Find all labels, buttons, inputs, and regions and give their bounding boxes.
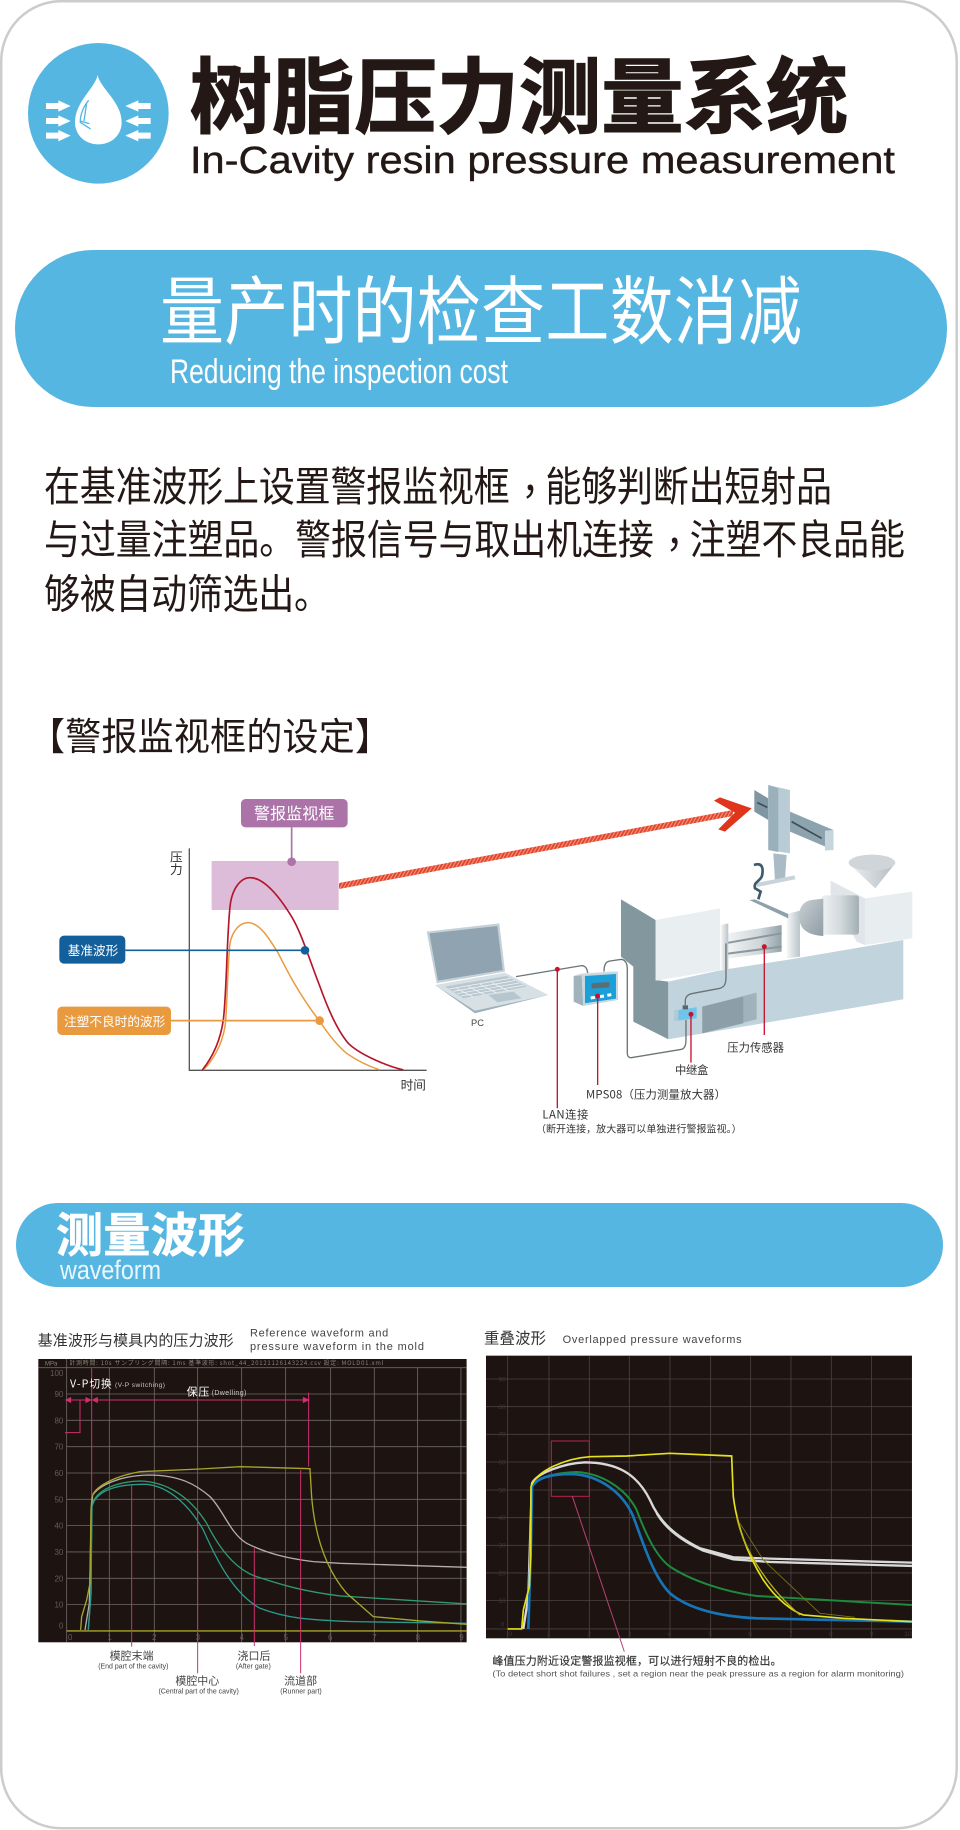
cables [516,943,726,1058]
x axis labels: 7 [372,1633,377,1642]
body text: 在基准波形上设置警报监视框 [44,454,510,514]
alarm region [551,1441,589,1496]
defective waveform label: 注塑不良时的波形 [64,1011,166,1030]
label: end part of the cavity [98,1647,168,1670]
axis labels: 4 [668,1631,672,1638]
panel heading english: Reference waveform and [250,1328,388,1340]
banner heading: 量产时的检查工数消减 [160,252,802,359]
body text: 能够判断出短射品 [545,454,832,514]
caption: 峰值压力附近设定警报监视框，可以进行短射不良的检出。 [492,1653,782,1669]
axis labels: 6 [748,1631,752,1638]
caption [492,1653,904,1679]
axis labels: 1 [547,1631,551,1638]
reference waveform curve [202,878,403,1070]
laptop PC [427,923,548,1028]
axis labels: 50 [498,1487,506,1494]
y axis labels [50,1369,64,1631]
callout line [572,1496,624,1652]
annotation: V-P switching: (V-P switching) [115,1382,165,1389]
x axis labels [68,1633,464,1642]
curve: after gate [85,1475,467,1630]
curve bundle: yellow [508,1453,912,1629]
panel heading: 重叠波形 [484,1326,546,1348]
subtitle: In-Cavity resin pressure measurement [190,140,895,182]
y axis labels: 80 [54,1416,64,1425]
panel heading: 基准波形与模具内的压力波形 [38,1330,234,1351]
x axis labels: 2 [152,1633,157,1642]
axes [189,848,427,1070]
annotation: dwelling: (Dwelling) [212,1390,246,1397]
pressure axis label: 力 [170,859,183,878]
x axis labels: 5 [284,1633,289,1642]
label: LAN connection [536,1106,742,1135]
curve: end part [88,1484,467,1630]
y axis labels: 100 [50,1369,64,1378]
banner subheading: waveform [59,1255,161,1285]
annotation lines [65,1368,309,1673]
y axis labels: 70 [54,1443,64,1452]
alarm region box [212,861,339,910]
caption: (To detect short shot failures , set a region near the peak pressure as a region for alarm monitoring) [492,1669,904,1679]
label: end part of the cavity: (End part of the cavity) [98,1663,168,1670]
banner heading: 测量波形 [56,1197,245,1266]
axis labels: 90 [498,1376,506,1383]
y axis labels: 0 [59,1622,64,1631]
curve: runner part [67,1467,467,1631]
label: LAN connection: （断开连接，放大器可以单独进行警报监视。） [536,1120,742,1135]
y axis labels: 20 [54,1574,64,1583]
panel: reference waveform [38,1328,467,1696]
MPS08 amplifier box [574,971,618,1006]
line chart: reference waveforms [38,1358,467,1673]
header strip text: MPa [45,1361,58,1367]
x axis labels: 4 [240,1633,245,1642]
label: central part of the cavity [158,1673,239,1696]
chart: alarm region concept [57,799,427,1093]
body text: 够被自动筛选出。 [44,562,330,621]
leader lines [555,944,767,1108]
x axis labels: 6 [328,1633,333,1642]
icon: water drop with pressure arrows [28,43,169,184]
label: after gate [236,1647,271,1670]
curve: central part [88,1481,467,1630]
time axis label: 时间 [401,1074,426,1093]
label: runner part [280,1673,322,1696]
body text: 注塑不良品能 [690,507,905,567]
laptop PC: PC [471,1018,484,1028]
axis labels: 10 [498,1598,506,1605]
annotation: dwelling: 保压 [187,1383,209,1399]
axis labels: 0 [501,1622,505,1629]
panel heading english: pressure waveform in the mold [250,1341,424,1353]
y axis labels: 50 [54,1495,64,1504]
axis labels: 60 [498,1459,506,1466]
axis labels: 30 [498,1543,506,1550]
take-out robot [754,785,833,899]
alarm region label [241,799,348,866]
x axis labels: 9 [459,1633,464,1642]
body text: ， [522,448,558,507]
axis labels: 7 [789,1631,793,1638]
defective waveform label [57,1007,324,1035]
panel heading english: Overlapped pressure waveforms [563,1334,742,1346]
relay box [674,1005,697,1021]
arrow: alarm signal to take-out robot [339,797,752,889]
reference waveform label [59,936,309,964]
axis labels: 9 [870,1631,874,1638]
label: pressure sensor: 压力传感器 [727,1040,784,1056]
label: MPS08 amplifier: MPS08（压力测量放大器） [586,1086,726,1102]
label: runner part: (Runner part) [280,1689,322,1696]
header strip text: 計測時間: 10s サンプリング間隔: 1ms 基準波形: shot_44_20121126143224.csv 設定: MOLD01.xml [69,1358,384,1367]
x axis labels: 1 [107,1633,112,1642]
y axis labels: 30 [54,1548,64,1557]
curve bundle: green [528,1472,912,1629]
body text: 与过量注塑品。警报信号与取出机连接 [44,507,654,567]
axis labels: 10 [904,1631,912,1638]
title: 树脂压力测量系统 [190,31,848,150]
y axis labels: 60 [54,1469,64,1478]
banner: waveform [16,1197,943,1287]
body text: ， [666,501,702,560]
label: LAN connection: LAN连接 [542,1106,588,1122]
x axis labels: 0 [68,1633,73,1642]
injection molding machine [621,855,912,1039]
y axis labels: 40 [54,1522,64,1531]
line chart: overlapped waveforms [486,1356,912,1638]
annotation: V-P switching [70,1376,165,1391]
y axis labels: 90 [54,1390,64,1399]
axis labels: 0 [508,1631,512,1638]
label: after gate: 浇口后 [237,1647,270,1663]
y axis labels: 10 [54,1601,64,1610]
banner: reducing inspection cost [15,250,947,407]
curve bundle: blue [528,1474,912,1629]
annotation: V-P switching: V-P切换 [70,1376,112,1391]
banner subheading: Reducing the inspection cost [170,353,508,391]
diagram: injection molding system [427,785,912,1135]
panel heading english [250,1328,424,1353]
x axis labels: 3 [196,1633,201,1642]
axis labels: 8 [829,1631,833,1638]
axis labels [498,1376,912,1638]
label: relay box: 中继盒 [675,1062,709,1078]
section heading: alarm region setting: 【警报监视框的设定】 [29,706,391,761]
label: after gate: (After gate) [236,1663,271,1670]
axis labels: 5 [708,1631,712,1638]
curve bundle: white [523,1462,912,1629]
pressure axis label: 压 [170,847,183,866]
annotation: dwelling [187,1383,246,1399]
alarm region label: 警报监视框 [254,800,334,824]
label: central part of the cavity: (Central part of the cavity) [158,1689,239,1696]
label: central part of the cavity: 模腔中心 [175,1673,219,1689]
defective waveform curve [203,923,380,1070]
axis labels: 2 [587,1631,591,1638]
pressure axis label [170,847,183,878]
axis labels: 20 [498,1570,506,1577]
label: runner part: 流道部 [284,1673,317,1689]
panel: overlapped waveforms [484,1326,912,1679]
reference waveform label: 基准波形 [68,940,119,959]
x axis labels: 8 [416,1633,421,1642]
label: end part of the cavity: 模腔末端 [110,1647,154,1663]
axis labels: 3 [628,1631,632,1638]
axis labels: 40 [498,1515,506,1522]
body text [44,448,905,621]
axis labels: 70 [498,1432,506,1439]
axis labels: 80 [498,1404,506,1411]
